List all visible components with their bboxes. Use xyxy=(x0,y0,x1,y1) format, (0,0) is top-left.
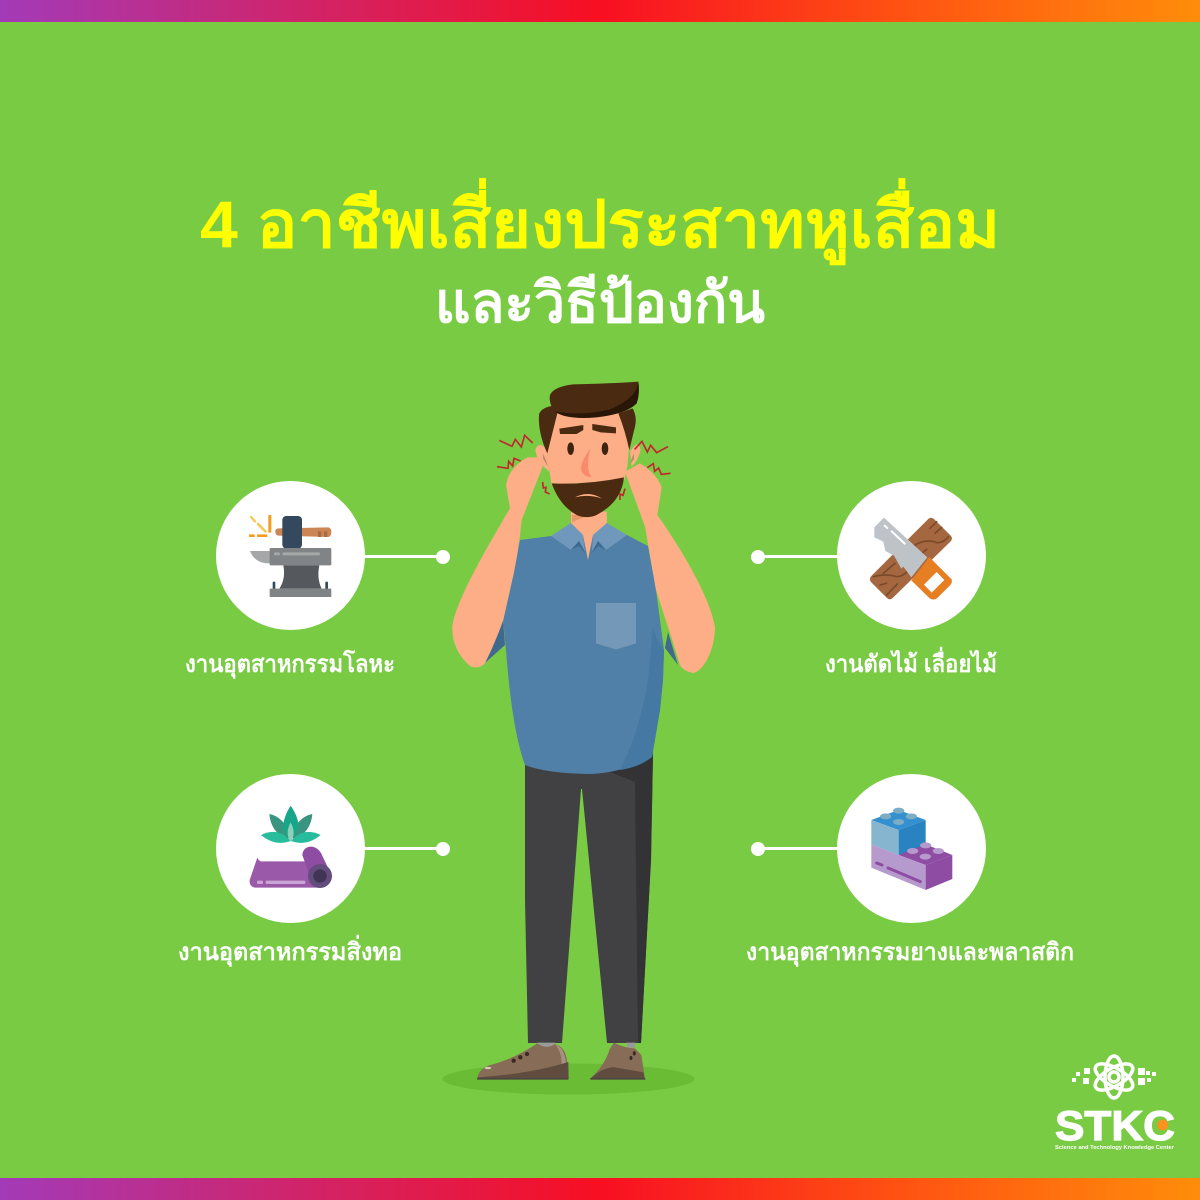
icon circle xyxy=(837,774,986,923)
left arm xyxy=(452,457,543,667)
connector line xyxy=(365,847,443,850)
icon: building blocks xyxy=(871,808,952,890)
icon: lotus and fabric roll xyxy=(250,806,332,888)
ears xyxy=(535,445,549,472)
hair sides xyxy=(539,406,557,453)
title line 1: 4 อาชีพเสี่ยงประสาทหูเสื่อม xyxy=(200,177,1000,266)
connector line xyxy=(758,555,838,558)
collar xyxy=(551,523,627,554)
icon: saw and wood xyxy=(870,518,952,600)
pocket xyxy=(596,603,636,650)
connector dot xyxy=(436,550,450,564)
logo wordmark: STKC xyxy=(1055,1102,1175,1149)
icon circle xyxy=(837,481,986,630)
logo atom mark xyxy=(1091,1056,1137,1098)
panel: rubber and plastics industry xyxy=(746,774,1074,968)
connector dot xyxy=(751,550,765,564)
sound shock marks xyxy=(497,435,671,500)
bottom gradient bar xyxy=(0,1178,1200,1200)
icon circle xyxy=(216,774,365,923)
label: งานอุตสาหกรรมสิ่งทอ xyxy=(178,934,402,968)
panel: textile industry xyxy=(178,774,450,968)
title line 2: และวิธีป้องกัน xyxy=(435,271,765,334)
connector line xyxy=(365,555,443,558)
connector line xyxy=(758,847,838,850)
panel: wood cutting xyxy=(751,481,997,678)
trousers xyxy=(525,750,653,1043)
icon: anvil and hammer xyxy=(249,515,331,597)
label: งานอุตสาหกรรมโลหะ xyxy=(185,649,395,680)
title xyxy=(200,177,1000,334)
upper body detail xyxy=(452,382,715,673)
label: งานตัดไม้ เลื่อยไม้ xyxy=(825,646,997,678)
right arm xyxy=(625,463,715,673)
connector dot xyxy=(751,842,765,856)
logo tagline: Science and Technology Knowledge Center xyxy=(1055,1145,1175,1151)
logo: STKC xyxy=(1055,1056,1175,1151)
shoes xyxy=(477,1043,645,1080)
eyebrows xyxy=(559,425,583,434)
neck xyxy=(571,512,607,560)
top gradient bar xyxy=(0,0,1200,22)
face xyxy=(547,410,630,485)
icon circle xyxy=(216,481,365,630)
ground shadow xyxy=(442,1064,694,1094)
logo orange dot xyxy=(1157,1120,1168,1130)
eyes xyxy=(567,442,574,455)
panel: metal industry xyxy=(185,481,450,680)
connector dot xyxy=(436,842,450,856)
logo pixel squares xyxy=(1072,1068,1156,1085)
shirt xyxy=(485,535,678,774)
character: man covering ears xyxy=(452,382,715,1080)
mouth xyxy=(575,494,602,499)
nose xyxy=(581,448,592,477)
label: งานอุตสาหกรรมยางและพลาสติก xyxy=(746,939,1074,968)
hair top xyxy=(550,382,639,418)
beard xyxy=(552,477,624,517)
